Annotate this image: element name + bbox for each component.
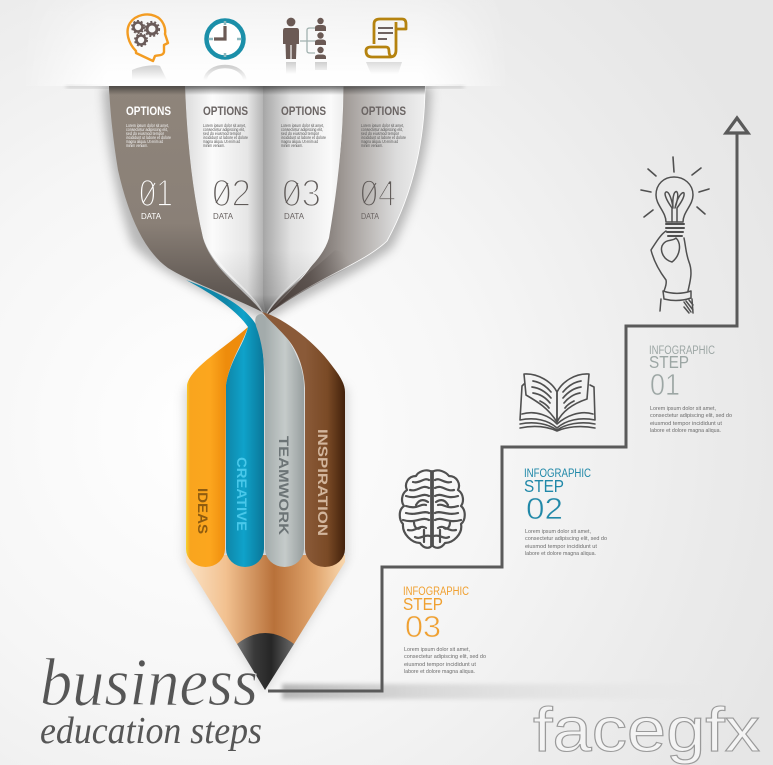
option 4 body: consectetur adipiscing elit, (361, 127, 403, 132)
step 01 body: consectetur adipiscing elit, sed do (650, 413, 732, 419)
option 2 body: incididunt ut labore et dolore (203, 135, 249, 140)
icon: light bulb in hand (641, 157, 709, 313)
option 4 body: magna aliqua. Ut enim ad (361, 139, 399, 144)
orange column (186, 327, 248, 567)
option 3 data label: DATA (284, 211, 304, 221)
step 01 number: 01 (650, 367, 680, 402)
option 3 body: consectetur adipiscing elit, (281, 127, 323, 132)
option 1 number: 01 (139, 173, 173, 215)
option 2 body (203, 123, 249, 148)
option 3 text (281, 106, 327, 221)
floor shadow under the stair line (282, 684, 722, 699)
step 03 body: labore et dolore magna aliqua. (404, 669, 475, 675)
step 02 body: eiusmod tempor incididunt ut (525, 544, 598, 550)
option 1 body: incididunt ut labore et dolore (126, 135, 172, 140)
top band edge shadow (66, 85, 464, 88)
option 4 body (361, 123, 407, 148)
step 02 body (525, 529, 607, 557)
step 03 body: Lorem ipsum dolor sit amet, (404, 647, 470, 653)
hand (651, 231, 691, 291)
option 1 body: magna aliqua. Ut enim ad (126, 139, 164, 144)
option 3 body: sed do eiusmod tempor (281, 131, 320, 136)
icon: head reflection (132, 65, 167, 80)
option 4 number: 04 (360, 173, 396, 214)
brain outline (400, 470, 465, 548)
option 1 body: sed do eiusmod tempor (126, 131, 165, 136)
step 02 block (524, 468, 607, 557)
option 4 data label: DATA (361, 211, 379, 221)
option 3 body (281, 123, 327, 148)
option 4 heading: OPTIONS (361, 106, 406, 118)
text lines (532, 381, 581, 408)
watermark: facegfx (533, 696, 760, 765)
step 03 kicker: INFOGRAPHIC (403, 586, 469, 598)
option 1 body: consectetur adipiscing elit, (126, 127, 168, 132)
manager figure (283, 18, 299, 59)
sleeve (660, 299, 693, 313)
subtitle: education steps (40, 710, 262, 752)
step 01 body (650, 406, 732, 434)
top band shadow on ribbons (109, 86, 425, 95)
ribbon 3 (263, 86, 343, 314)
option 1 text (126, 106, 173, 221)
arrow head (726, 118, 748, 133)
ideas label: IDEAS (195, 488, 210, 534)
icon: team hierarchy (283, 18, 326, 59)
option 4 body: sed do eiusmod tempor (361, 131, 400, 136)
ribbon twist shading (212, 250, 328, 314)
step 03 heading: STEP (403, 594, 443, 614)
icon: clock reflection (205, 66, 245, 80)
option 1 heading: OPTIONS (126, 106, 171, 118)
option 3 body: minim veniam. (281, 143, 303, 148)
step 01 body: eiusmod tempor incididunt ut (650, 421, 723, 427)
option 3 body: magna aliqua. Ut enim ad (281, 139, 319, 144)
step 02 body: consectetur adipiscing elit, sed do (525, 536, 607, 542)
step 02 number: 02 (526, 491, 563, 526)
step 02 body: labore et dolore magna aliqua. (525, 551, 596, 557)
left page (524, 374, 557, 422)
icon: clock (206, 20, 244, 58)
bulb glass (656, 177, 693, 222)
rays (641, 157, 709, 217)
brown column (262, 312, 345, 567)
folds left (403, 479, 430, 542)
pencil lead tip (237, 633, 294, 690)
option 4 body: minim veniam. (361, 143, 383, 148)
central fissure (430, 472, 434, 545)
pencil wood cone (186, 555, 345, 644)
option 4 body: incididunt ut labore et dolore (361, 135, 407, 140)
cuff (663, 291, 691, 300)
panel: option ribbons (109, 86, 425, 316)
step 02 body: Lorem ipsum dolor sit amet, (525, 529, 591, 535)
icon: open book (520, 374, 595, 431)
icon: scroll (366, 19, 406, 57)
icon: head with gears (128, 14, 168, 61)
ribbon shadows (103, 86, 431, 320)
top band (64, 26, 468, 86)
stair arrow line (268, 118, 748, 691)
option 2 text (203, 106, 251, 221)
option 1 body: minim veniam. (126, 143, 148, 148)
step 01 kicker: INFOGRAPHIC (649, 345, 715, 357)
step 01 block (649, 345, 732, 434)
step 01 body: Lorem ipsum dolor sit amet, (650, 406, 716, 412)
ribbon 4 dark tip (266, 250, 368, 316)
option 3 heading: OPTIONS (281, 106, 326, 118)
bulb screw (666, 224, 684, 236)
option 2 body: magna aliqua. Ut enim ad (203, 139, 241, 144)
option 2 heading: OPTIONS (203, 106, 248, 118)
option 1 body (126, 123, 172, 148)
blue column (186, 280, 264, 567)
step 03 body: consectetur adipiscing elit, sed do (404, 654, 486, 660)
ribbon 1 (109, 86, 262, 312)
option 2 body: minim veniam. (203, 143, 225, 148)
right page (557, 374, 589, 422)
folds right (434, 479, 461, 542)
pencil drop shadow (184, 320, 348, 692)
option 3 body: incididunt ut labore et dolore (281, 135, 327, 140)
step 01 body: labore et dolore magna aliqua. (650, 428, 721, 434)
title: business (40, 644, 258, 720)
option 2 data label: DATA (213, 211, 233, 221)
step 01 heading: STEP (649, 352, 689, 372)
option 2 number: 02 (212, 173, 251, 215)
icon: brain (400, 470, 465, 548)
step 02 kicker: INFOGRAPHIC (524, 468, 591, 480)
option 3 number: 03 (282, 173, 321, 215)
creative label: CREATIVE (234, 457, 249, 531)
option 3 body: Lorem ipsum dolor sit amet, (281, 123, 324, 128)
step 03 block (403, 586, 486, 675)
grey column (255, 314, 304, 567)
step 03 number: 03 (405, 609, 441, 644)
option 4 body: Lorem ipsum dolor sit amet, (361, 123, 404, 128)
option 2 body: consectetur adipiscing elit, (203, 127, 245, 132)
step 03 body (404, 647, 486, 675)
team members (315, 18, 326, 59)
option 2 body: Lorem ipsum dolor sit amet, (203, 123, 246, 128)
icon: scroll reflection (366, 62, 402, 74)
teamwork label: TEAMWORK (276, 436, 291, 535)
icon: team reflection (286, 62, 327, 74)
step 02 heading: STEP (524, 476, 564, 496)
filament (665, 192, 684, 222)
panel: pencil (184, 280, 348, 692)
step 03 body: eiusmod tempor incididunt ut (404, 662, 477, 668)
page stack (520, 384, 595, 431)
ribbon 2 (185, 86, 263, 312)
option 1 body: Lorem ipsum dolor sit amet, (126, 123, 169, 128)
option 4 text (360, 106, 407, 221)
ribbon 4 (266, 86, 425, 316)
org lines (300, 28, 316, 53)
option 2 body: sed do eiusmod tempor (203, 131, 242, 136)
option 1 data label: DATA (141, 211, 161, 221)
inspiration label: INSPIRATION (315, 429, 330, 536)
